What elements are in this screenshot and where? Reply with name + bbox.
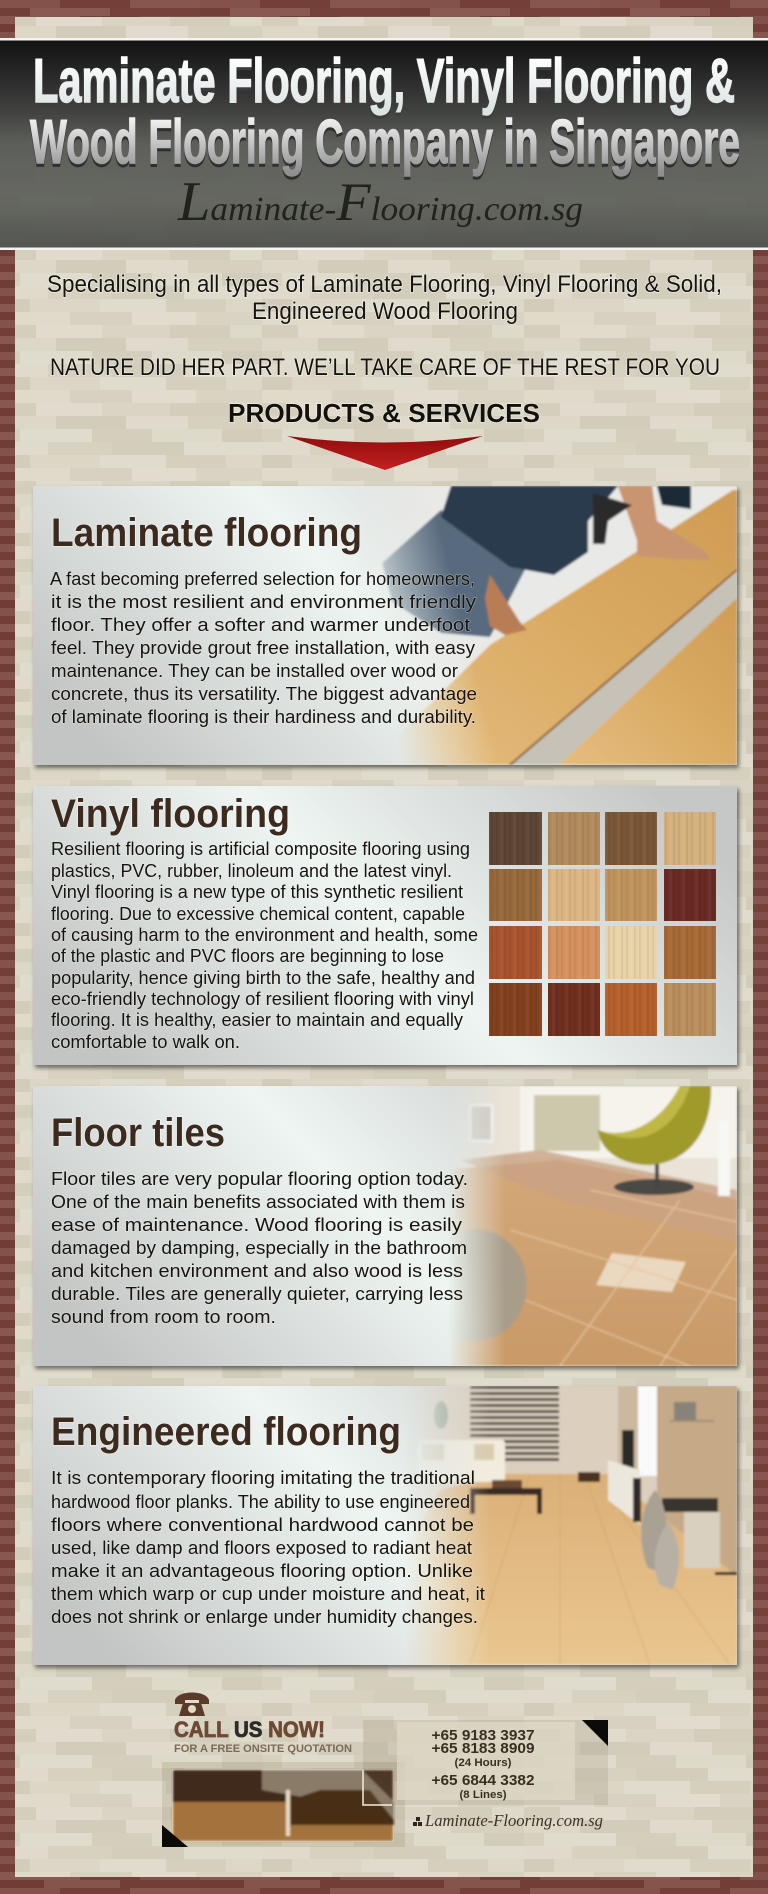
body text: Vinyl flooring is a new type of this synthetic resilient (51, 882, 463, 902)
icon: telephone (175, 1692, 209, 1716)
body text: does not shrink or enlarge under humidity changes. (51, 1607, 478, 1627)
script site name: Laminate-Flooring.com.sg (177, 171, 583, 233)
subheading: FOR A FREE ONSITE QUOTATION (174, 1743, 352, 1755)
body text: of laminate flooring is their hardiness and durability. (51, 707, 476, 727)
body text: of the plastic and PVC floors are beginning to lose (51, 946, 444, 966)
footer photo frame (162, 1762, 405, 1847)
call us now heading: CALL US NOW! (174, 1717, 325, 1742)
body text: Resilient flooring is artificial composite flooring using (51, 839, 470, 859)
panel: vinyl flooring (33, 786, 739, 1068)
body text (51, 839, 478, 1052)
body text: floors where conventional hardwood cannot be (51, 1515, 474, 1535)
body text: plastics, PVC, rubber, linoleum and the latest vinyl. (51, 861, 452, 881)
phone numbers: +65 9183 3937 (432, 1727, 534, 1744)
body text: concrete, thus its versatility. The biggest advantage (51, 684, 477, 704)
body text: used, like damp and floors exposed to radiant heat (51, 1538, 472, 1558)
body text: eco-friendly technology of resilient flooring with vinyl (51, 989, 474, 1009)
body text: floor. They offer a softer and warmer underfoot (51, 615, 470, 635)
panel: floor tiles (33, 1086, 739, 1369)
photo: installer laying laminate planks (360, 486, 737, 765)
footer site name: Laminate-Flooring.com.sg (424, 1811, 603, 1830)
body text: popularity, hence giving birth to the safe, healthy and (51, 968, 475, 988)
body text: hardwood floor planks. The ability to use engineered (51, 1492, 470, 1512)
phone numbers: +65 6844 3382 (432, 1772, 534, 1789)
body text: flooring. Due to excessive chemical content, capable (51, 904, 465, 924)
body text: ease of maintenance. Wood flooring is easily (51, 1215, 462, 1235)
body text: sound from room to room. (51, 1307, 276, 1327)
body text: them which warp or cup under moisture and heat, it (51, 1584, 485, 1604)
body text: One of the main benefits associated with them is (51, 1192, 465, 1212)
swatch grid (489, 812, 716, 1036)
phone numbers (432, 1727, 534, 1801)
body text: of causing harm to the environment and health, some (51, 925, 478, 945)
body text: It is contemporary flooring imitating the traditional (51, 1468, 475, 1488)
phone numbers: (8 Lines) (460, 1789, 507, 1801)
body text (51, 1468, 485, 1627)
products and services heading: PRODUCTS & SERVICES (228, 398, 540, 428)
intro text (47, 271, 722, 325)
red arrow (287, 436, 483, 470)
body text: comfortable to walk on. (51, 1032, 240, 1052)
photo: tiled room with green chair (423, 1086, 737, 1366)
body text: maintenance. They can be installed over wood or (51, 661, 458, 681)
body text: durable. Tiles are generally quieter, carrying less (51, 1284, 463, 1304)
heading: Engineered flooring (51, 1410, 401, 1454)
contact panel (363, 1720, 608, 1805)
header band (0, 38, 768, 250)
body text: make it an advantageous flooring option. Unlike (51, 1561, 473, 1581)
heading: Floor tiles (51, 1111, 225, 1155)
body text: it is the most resilient and environment friendly (51, 592, 476, 612)
body text: feel. They provide grout free installation, with easy (51, 638, 475, 658)
phone numbers: +65 8183 8909 (432, 1740, 534, 1757)
body text: flooring. It is healthy, easier to maintain and equally (51, 1010, 463, 1030)
body text: damaged by damping, especially in the bathroom (51, 1238, 467, 1258)
footer: call to action (162, 1692, 608, 1847)
panel: engineered flooring (33, 1386, 739, 1668)
body text: A fast becoming preferred selection for homeowners, (50, 569, 475, 589)
body text (51, 1169, 468, 1327)
body text: Floor tiles are very popular flooring option today. (51, 1169, 468, 1189)
photo: living room with blond wood floor (400, 1386, 737, 1665)
body text (50, 569, 477, 727)
phone numbers: (24 Hours) (454, 1757, 512, 1769)
panel: laminate flooring (33, 486, 739, 768)
heading: Vinyl flooring (51, 792, 290, 836)
intro text: Specialising in all types of Laminate Flooring, Vinyl Flooring & Solid, (47, 271, 722, 298)
heading: Laminate flooring (51, 511, 362, 555)
body text: and kitchen environment and also wood is less (51, 1261, 463, 1281)
intro text: Engineered Wood Flooring (252, 298, 518, 325)
